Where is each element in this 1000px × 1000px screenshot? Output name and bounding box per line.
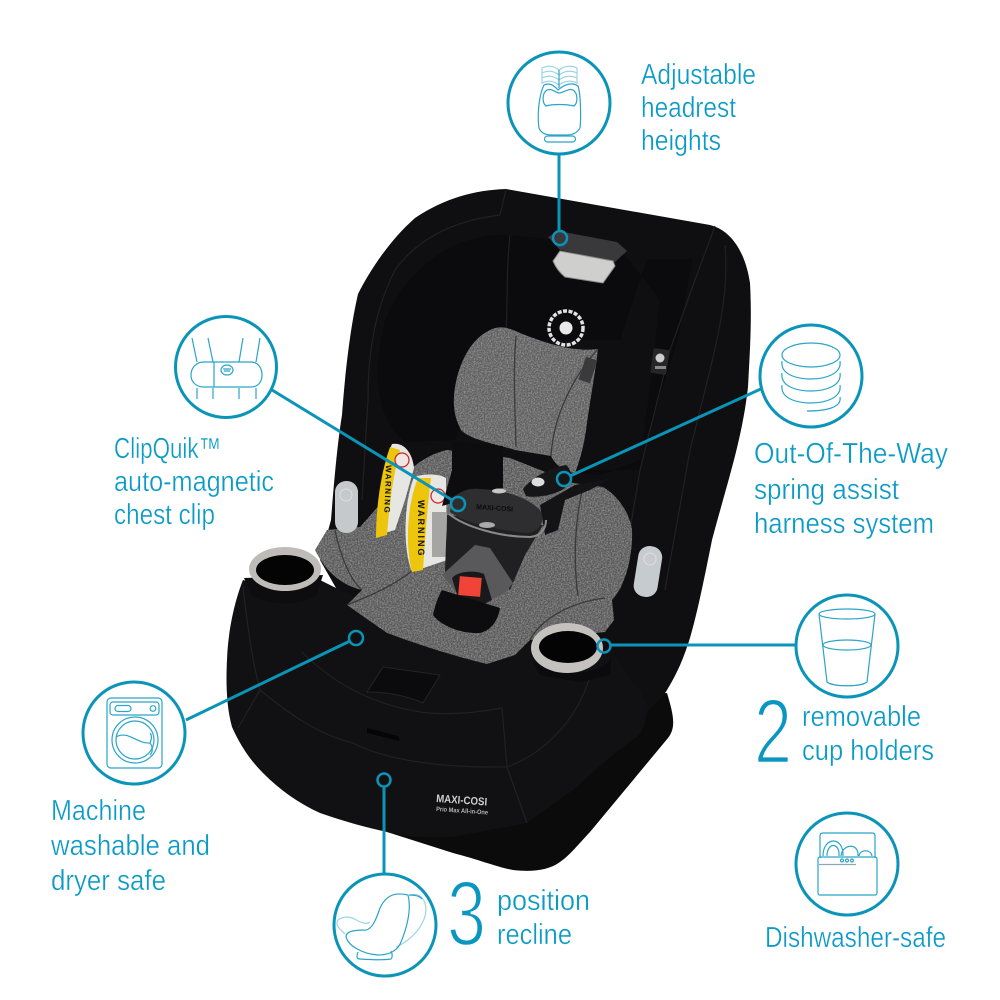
callout: machine washable — [50, 631, 363, 897]
callout: position recline: recline — [497, 919, 572, 951]
headrest handle — [548, 231, 627, 283]
right side button — [632, 544, 664, 599]
product name on seat: Prio Max All-in-One — [436, 806, 489, 817]
label: Dishwasher-safe — [765, 922, 946, 954]
callout: ClipQuik chest clip — [114, 316, 465, 531]
back panel stitching — [362, 190, 726, 590]
car seat photo — [227, 189, 751, 871]
callout: machine washable: dryer safe — [51, 865, 166, 897]
callout: ClipQuik chest clip: chest clip — [114, 499, 215, 531]
icon: reclined seat — [337, 894, 426, 960]
label: position — [497, 885, 590, 917]
callout: dishwasher safe — [765, 813, 946, 954]
icon: glass — [819, 609, 875, 686]
warning labels — [376, 444, 447, 572]
side badge — [650, 348, 670, 375]
big number 2: 2 — [754, 681, 792, 783]
callout: machine washable: washable and — [50, 830, 210, 862]
right cup holder — [531, 623, 612, 682]
grey back and seat pad — [315, 450, 632, 664]
warning labels: WARNING — [382, 465, 393, 514]
icon: dishwasher — [818, 833, 877, 895]
callout: ClipQuik chest clip: auto-magnetic — [114, 466, 274, 498]
big number 3: 3 — [447, 863, 486, 965]
label: removable — [802, 701, 921, 733]
callout: spring assist harness — [557, 325, 948, 540]
icon: washing machine — [107, 698, 162, 768]
chest clip: MAXI-COSI — [476, 504, 513, 514]
seat base — [387, 693, 673, 871]
label: Adjustable — [641, 59, 756, 91]
label: Out-Of-The-Way — [754, 438, 948, 470]
product name on seat — [436, 793, 489, 817]
round logo — [549, 311, 583, 345]
callout: adjustable headrest heights: headrest — [641, 92, 736, 124]
callout: cup holders: cup holders — [802, 735, 934, 767]
product name on seat: MAXI-COSI — [436, 793, 488, 809]
left cup holder — [244, 547, 323, 604]
callout: position recline — [334, 774, 590, 976]
callout: cup holders — [598, 595, 934, 783]
warning labels: WARNING — [416, 500, 426, 558]
grey headrest cushion — [454, 327, 598, 473]
seat back shell — [320, 189, 751, 720]
left side button — [335, 481, 358, 533]
icon: headrest — [538, 66, 581, 142]
crotch buckle — [442, 545, 513, 606]
callout: adjustable headrest heights: heights — [641, 125, 721, 157]
crotch flap — [433, 590, 500, 633]
callout: spring assist harness: harness system — [754, 508, 934, 540]
label: ClipQuik™ — [114, 433, 221, 465]
callout: adjustable headrest heights — [508, 52, 756, 245]
chest clip — [449, 488, 546, 537]
seat front cushion — [227, 580, 647, 837]
label: Machine — [51, 795, 146, 827]
callout: spring assist harness: spring assist — [754, 474, 899, 506]
icon: chest clip — [191, 338, 262, 399]
icon: spring coil — [782, 343, 840, 411]
harness straps — [442, 442, 612, 590]
shoulder harness pad — [523, 465, 571, 497]
